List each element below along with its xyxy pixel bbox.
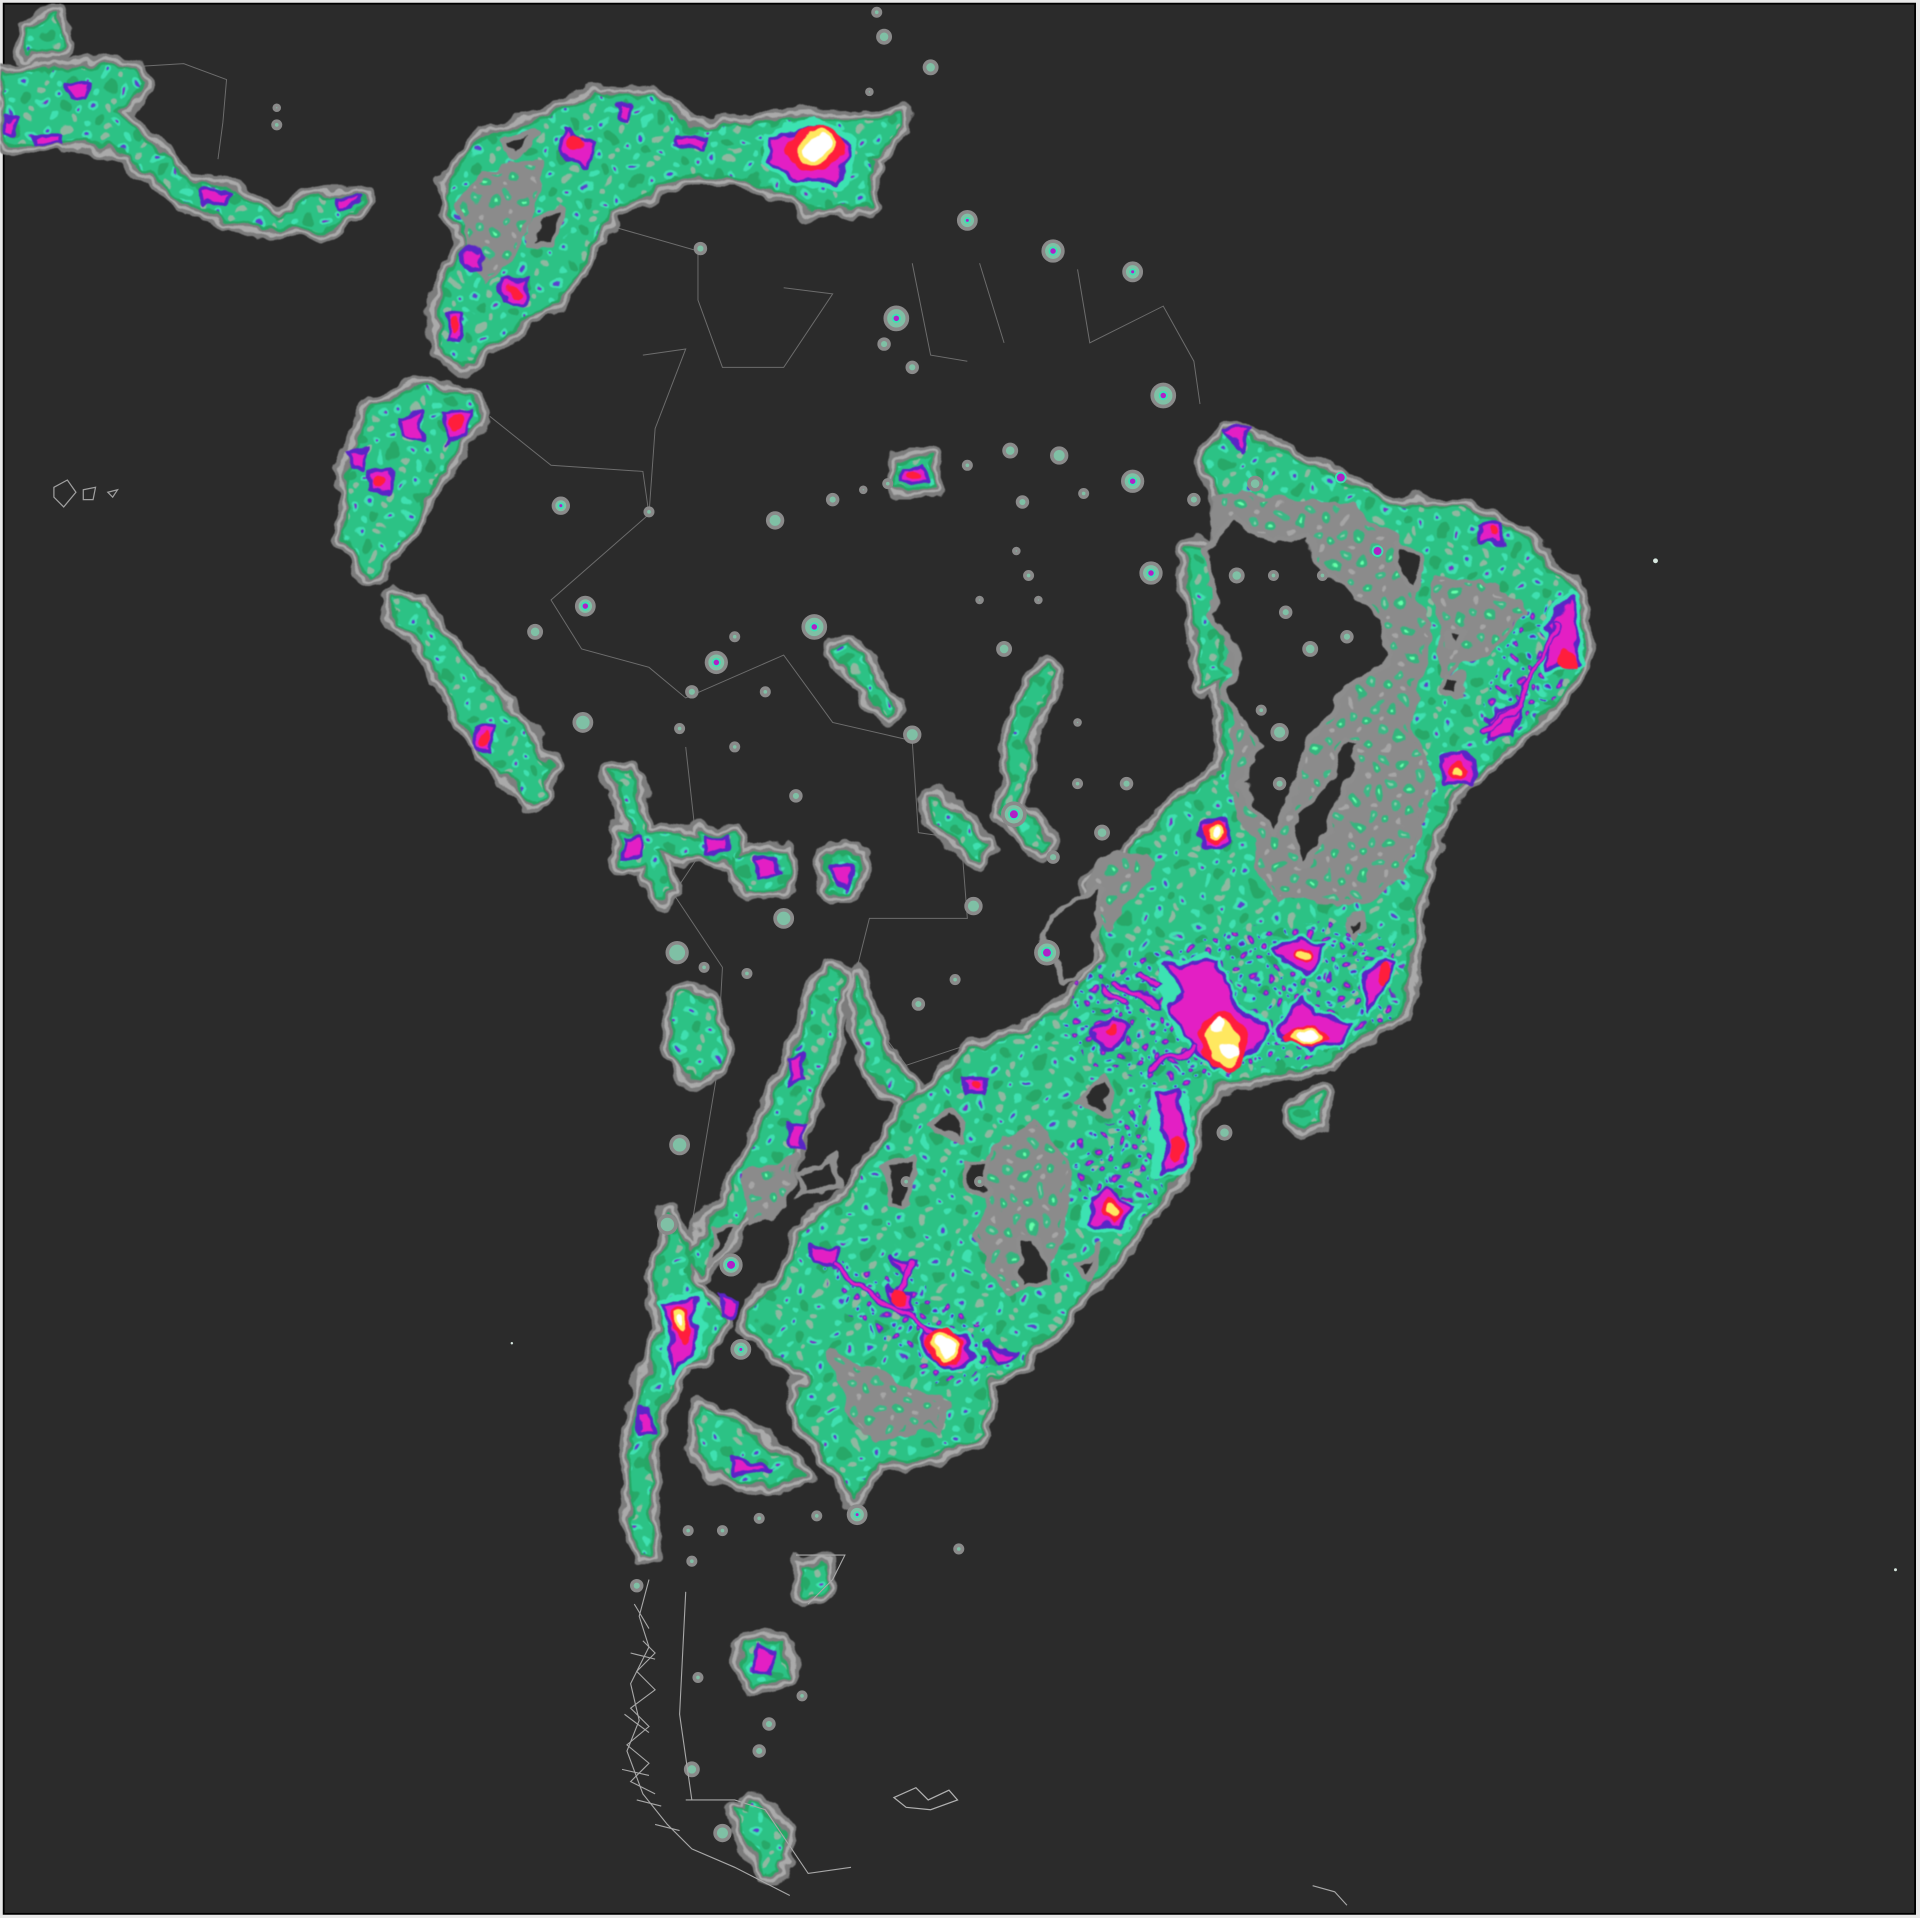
- purple and magenta urban zones: [6, 81, 1577, 1673]
- Falkland Islands outline: [894, 1788, 958, 1810]
- magenta centres of larger towns: [558, 218, 1382, 1517]
- isolated bright specks: [511, 558, 1897, 1571]
- gray glow halo: [6, 17, 1584, 1873]
- dark gaps in the glow: [502, 132, 1464, 1288]
- gray speckled interior: northeast Brazil and Pampas: [459, 159, 1524, 1439]
- small isolated towns: [273, 9, 1352, 1840]
- bright city cores: [371, 126, 1575, 1363]
- green glow regions: [6, 17, 1584, 1873]
- Galapagos Islands outline: [54, 480, 118, 507]
- magenta corridors: [833, 624, 1555, 1341]
- scattered urban speckle in southeast Brazil: [808, 600, 1573, 1384]
- country borders and coastlines: [122, 64, 1200, 1347]
- teal halos around city hotspots: [664, 122, 1580, 1378]
- light pollution layers: [6, 17, 1584, 1873]
- Patagonia and Chilean fjord coastline: [622, 1555, 1347, 1905]
